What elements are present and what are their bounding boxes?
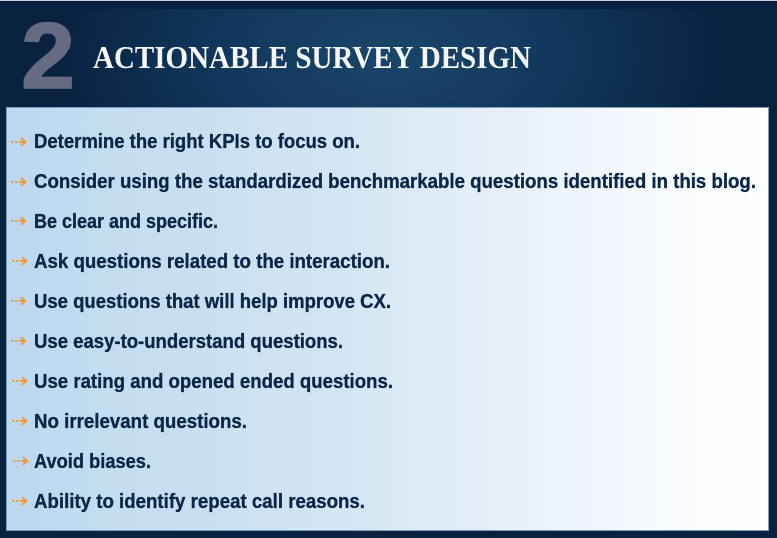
item 10: Ability to identify repeat call reasons. [34,490,365,513]
item 3: Be clear and specific. [34,210,218,233]
item 4: Ask questions related to the interaction. [34,250,390,273]
item 7: Use rating and opened ended questions. [34,370,393,393]
header band [0,9,777,107]
item 8: No irrelevant questions. [34,410,247,433]
item 1: Determine the right KPIs to focus on. [34,130,360,153]
title: ACTIONABLE SURVEY DESIGN [93,39,531,75]
panel: checklist [6,108,768,530]
section number: 2 [21,3,75,108]
item 5: Use questions that will help improve CX. [34,290,391,313]
item 9: Avoid biases. [34,450,151,473]
item 6: Use easy-to-understand questions. [34,330,343,353]
panel background [6,108,768,530]
top edge line [0,0,777,1]
